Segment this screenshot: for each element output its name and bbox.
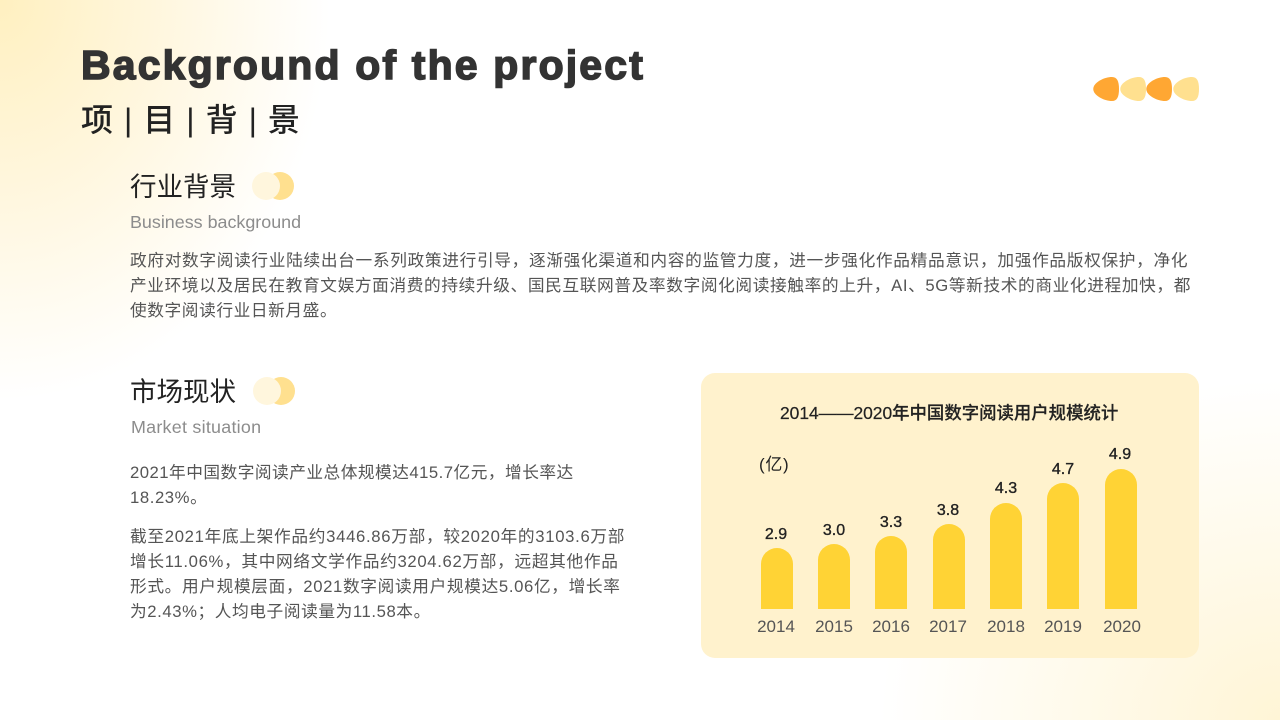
text block: market details: 增长11.06%，其中网络文学作品约3204.62万部，远超其他作品 [130,552,619,571]
subheading: business background: Business background [130,212,301,232]
chart unit: (亿) [759,455,789,474]
text block: industry background: 产业环境以及居民在教育文娱方面消费的持续升级、国民互联网普及率数字阅化阅读接触率的上升，AI、5G等新技术的商业化进程加快，都 [130,276,1191,295]
text block: market details: 为2.43%；人均电子阅读量为11.58本。 [130,602,431,621]
text block: industry background: 使数字阅读行业日新月盛。 [130,301,337,320]
title: Background of the project [81,42,645,88]
icon: decorative petals [1093,77,1199,101]
text block: industry background [130,251,1191,320]
bar chart: 4.9 [1109,446,1131,463]
bar chart: 2017 [929,617,967,636]
text block: industry background: 政府对数字阅读行业陆续出台一系列政策进行引导，逐渐强化渠道和内容的监管力度，进一步强化作品精品意识，加强作品版权保护，净化 [130,251,1188,270]
bar chart: 2019 [1044,617,1082,636]
icon: overlapping circles [253,377,295,405]
bar chart: 2020 [1103,617,1141,636]
text block: market details: 截至2021年底上架作品约3446.86万部，较2020年的3103.6万部 [130,527,625,546]
bar chart: 2014 [757,617,795,636]
bar chart: 4.7 [1052,461,1074,478]
subtitle: 项 | 目 | 背 | 景 [81,102,301,138]
bar chart: 2018 [987,617,1025,636]
bar chart: 2015 [815,617,853,636]
bar chart: 4.3 [995,480,1017,497]
subheading: market situation: Market situation [131,417,261,437]
bar chart: 3.0 [823,522,845,539]
bar chart: 2.9 [765,526,787,543]
icon: overlapping circles [252,172,294,200]
panel: bar chart [701,373,1199,658]
text block: market details [130,527,625,621]
text block: market size: 18.23%。 [130,488,207,507]
chart title: 2014——2020年中国数字阅读用户规模统计 [780,403,1118,423]
text block: market details: 形式。用户规模层面，2021数字阅读用户规模达5.06亿，增长率 [130,577,621,596]
text block: market size: 2021年中国数字阅读产业总体规模达415.7亿元，增长率达 [130,463,574,482]
heading: market situation: 市场现状 [130,377,236,407]
bar chart: 3.3 [880,514,902,531]
heading: industry background: 行业背景 [130,172,236,202]
bar chart: 3.8 [937,502,959,519]
text block: market size [130,463,574,507]
bar chart: 2016 [872,617,910,636]
